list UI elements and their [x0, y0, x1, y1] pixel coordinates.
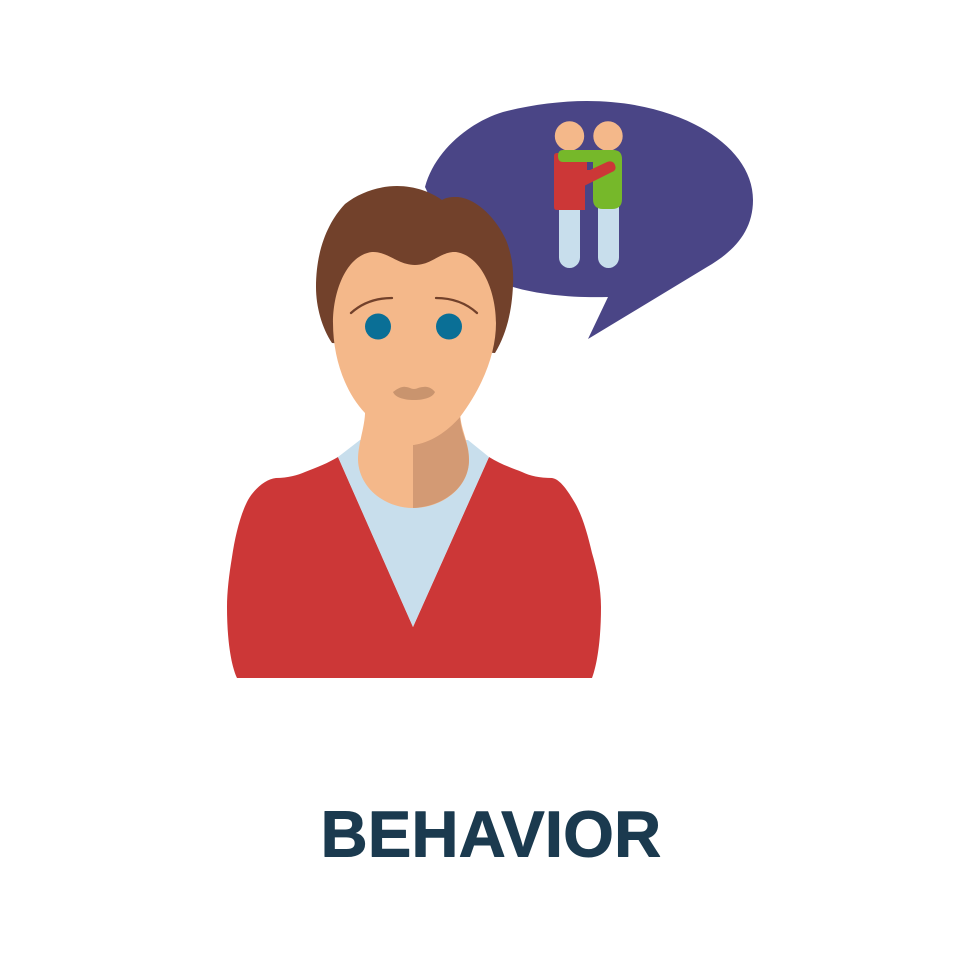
t-shirt: [338, 440, 489, 627]
icon: two people hugging: [554, 121, 623, 268]
title: BEHAVIOR: [321, 798, 661, 870]
heads: [555, 121, 623, 151]
neck: [358, 408, 469, 508]
speech bubble: [425, 101, 753, 339]
red person torso: [554, 153, 587, 210]
legs: [559, 205, 619, 268]
mouth: [393, 387, 435, 400]
eyes: [365, 314, 462, 340]
neck shadow: [413, 417, 469, 508]
person: [227, 186, 601, 678]
hair: [316, 186, 513, 353]
sweater: [227, 457, 601, 678]
face: [333, 252, 496, 445]
eyebrows: [351, 298, 477, 313]
red person arm: [584, 161, 616, 186]
green person body and arm: [558, 150, 622, 209]
